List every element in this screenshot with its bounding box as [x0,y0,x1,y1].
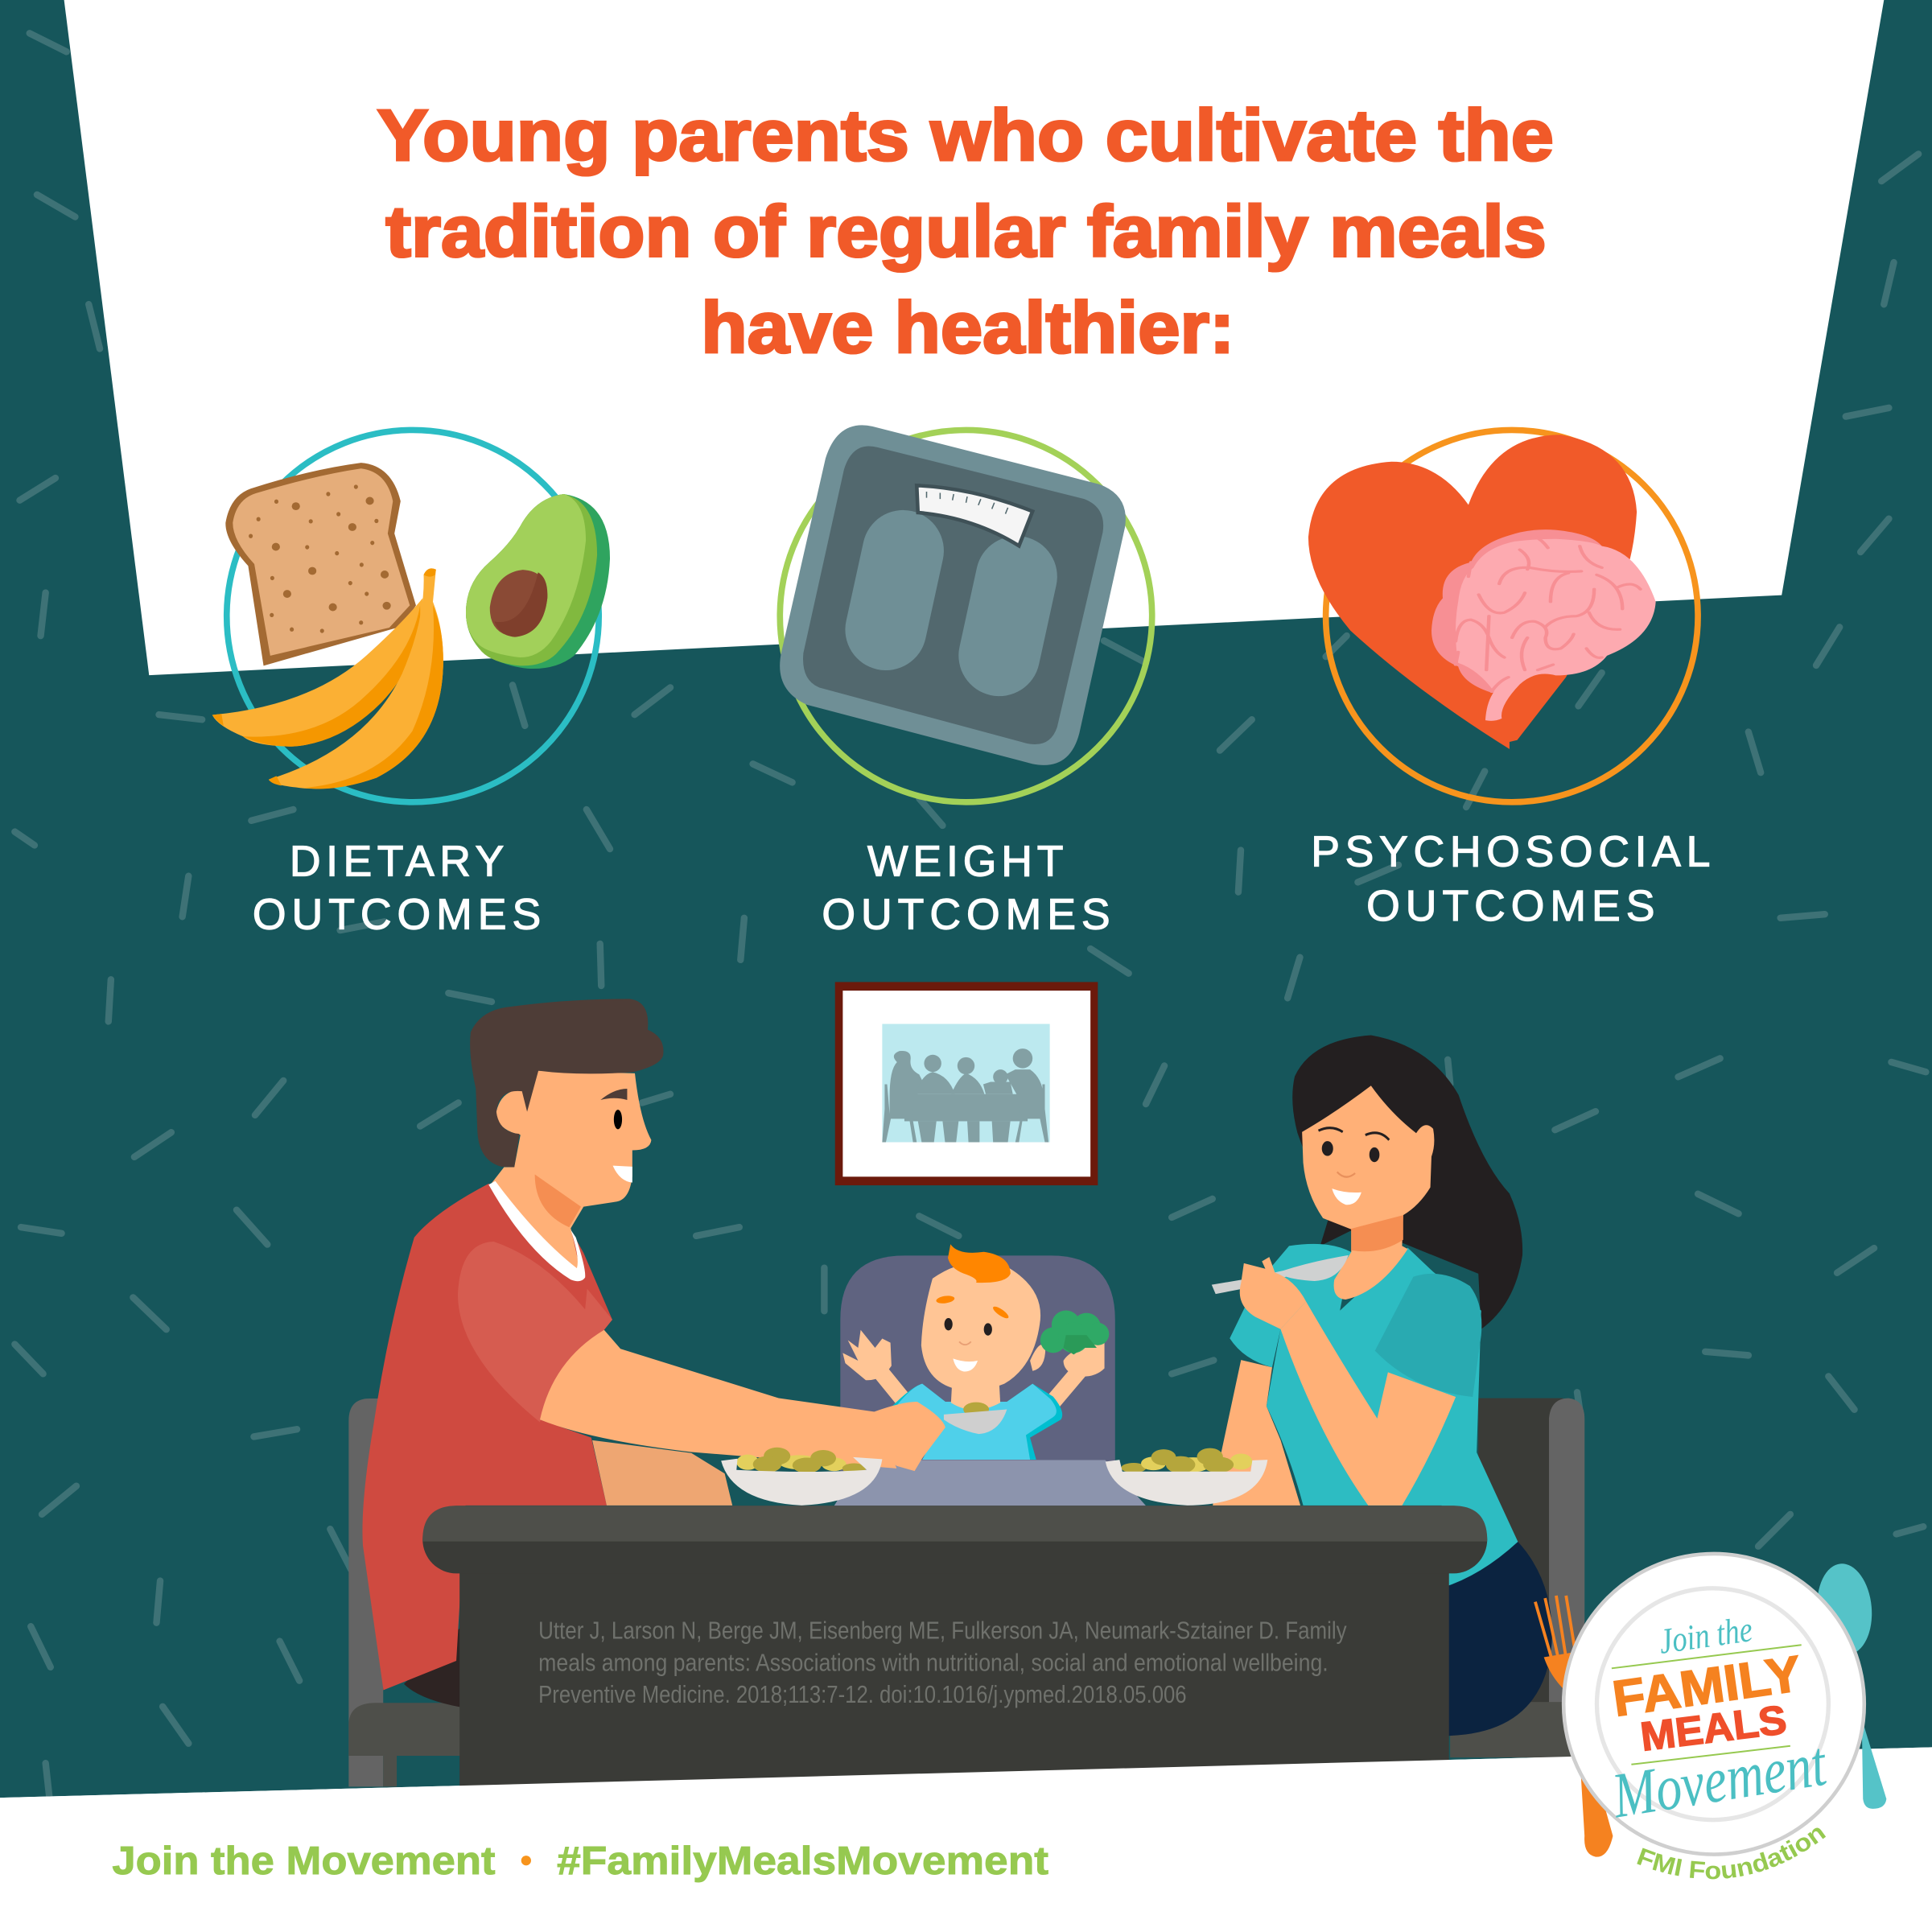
hand [1240,1257,1306,1329]
title [377,95,1554,369]
label: weight outcomes: OUTCOMES [822,891,1110,939]
citation text [538,1617,1347,1708]
icon: avocado [466,494,610,669]
label: dietary outcomes: OUTCOMES [253,891,541,939]
spoon [944,1410,1007,1434]
high chair [840,1255,1115,1479]
table [422,1506,1487,1788]
hair [1292,1035,1522,1329]
label: dietary outcomes: DIETARY [290,838,504,886]
icon: bread slice [225,463,416,665]
chair: man's [348,1399,468,1786]
label: weight outcomes [822,838,1110,939]
FMI Foundation: FMI Foundation [1637,1828,1827,1880]
Join the: Join the [1657,1609,1755,1662]
citation text: Preventive Medicine. 2018;113:7-12. doi:10.1016/j.ypmed.2018.05.006 [538,1681,1187,1708]
woman [1106,1035,1552,1736]
man [362,999,1007,1707]
shirt [1230,1244,1518,1588]
label: weight outcomes: WEIGHT [867,838,1063,886]
icon: bananas [212,568,443,789]
panel: weight outcomes icon [780,425,1152,802]
title: Young parents who cultivate the [377,95,1554,176]
shirt [362,1184,612,1690]
icon: brain [1431,529,1656,721]
hair [470,999,663,1168]
footer call to action [112,1839,1048,1883]
neck and face [491,1071,651,1274]
citation text: meals among parents: Associations with nutritional, social and emotional wellbeing. [538,1649,1329,1676]
near upper arm lower left [1213,1360,1300,1506]
framed family picture [835,982,1098,1185]
forearm [1280,1301,1456,1506]
footer call to action: Join the Movement [112,1839,496,1883]
Movement: Movement [1607,1728,1831,1831]
label: psychosocial outcomes: PSYCHOSOCIAL [1311,827,1710,875]
footer call to action: #FamilyMealsMovement [557,1839,1048,1883]
near arm [540,1330,896,1469]
white bottom band [0,1747,1932,1932]
title: have healthier: [701,287,1234,369]
hand [874,1402,945,1471]
face [1302,1085,1434,1300]
label: dietary outcomes [253,838,541,939]
panel: psychosocial outcomes icon [1308,430,1698,802]
icon: spoon [1814,1561,1886,1809]
MEALS: MEALS [1638,1696,1789,1760]
chair: woman's [1450,1399,1584,1757]
FAMILY: FAMILY [1609,1646,1805,1728]
icon: fork [1535,1596,1613,1857]
logo: Family Meals Movement [1534,1551,1886,1880]
label: psychosocial outcomes [1311,827,1710,930]
icon: heart [1308,435,1637,749]
plate [1563,1554,1864,1855]
pants [404,1628,460,1707]
citation text: Utter J, Larson N, Berge JM, Eisenberg ME, Fulkerson JA, Neumark-Sztainer D. Family [538,1617,1347,1645]
bowl with food [1106,1448,1267,1506]
spoon [1212,1255,1349,1294]
collar [488,1181,585,1281]
far arm [592,1440,732,1506]
pants [1442,1542,1552,1736]
icon: bathroom scale [780,425,1126,765]
sleeve [1375,1274,1481,1397]
panel: dietary outcomes icon [212,430,610,802]
baby [842,1244,1109,1460]
icon: broccoli [1040,1310,1109,1354]
title: tradition of regular family meals [385,191,1547,272]
bowl with food [721,1448,882,1506]
placemat [834,1460,1146,1506]
label: psychosocial outcomes: OUTCOMES [1366,882,1654,930]
